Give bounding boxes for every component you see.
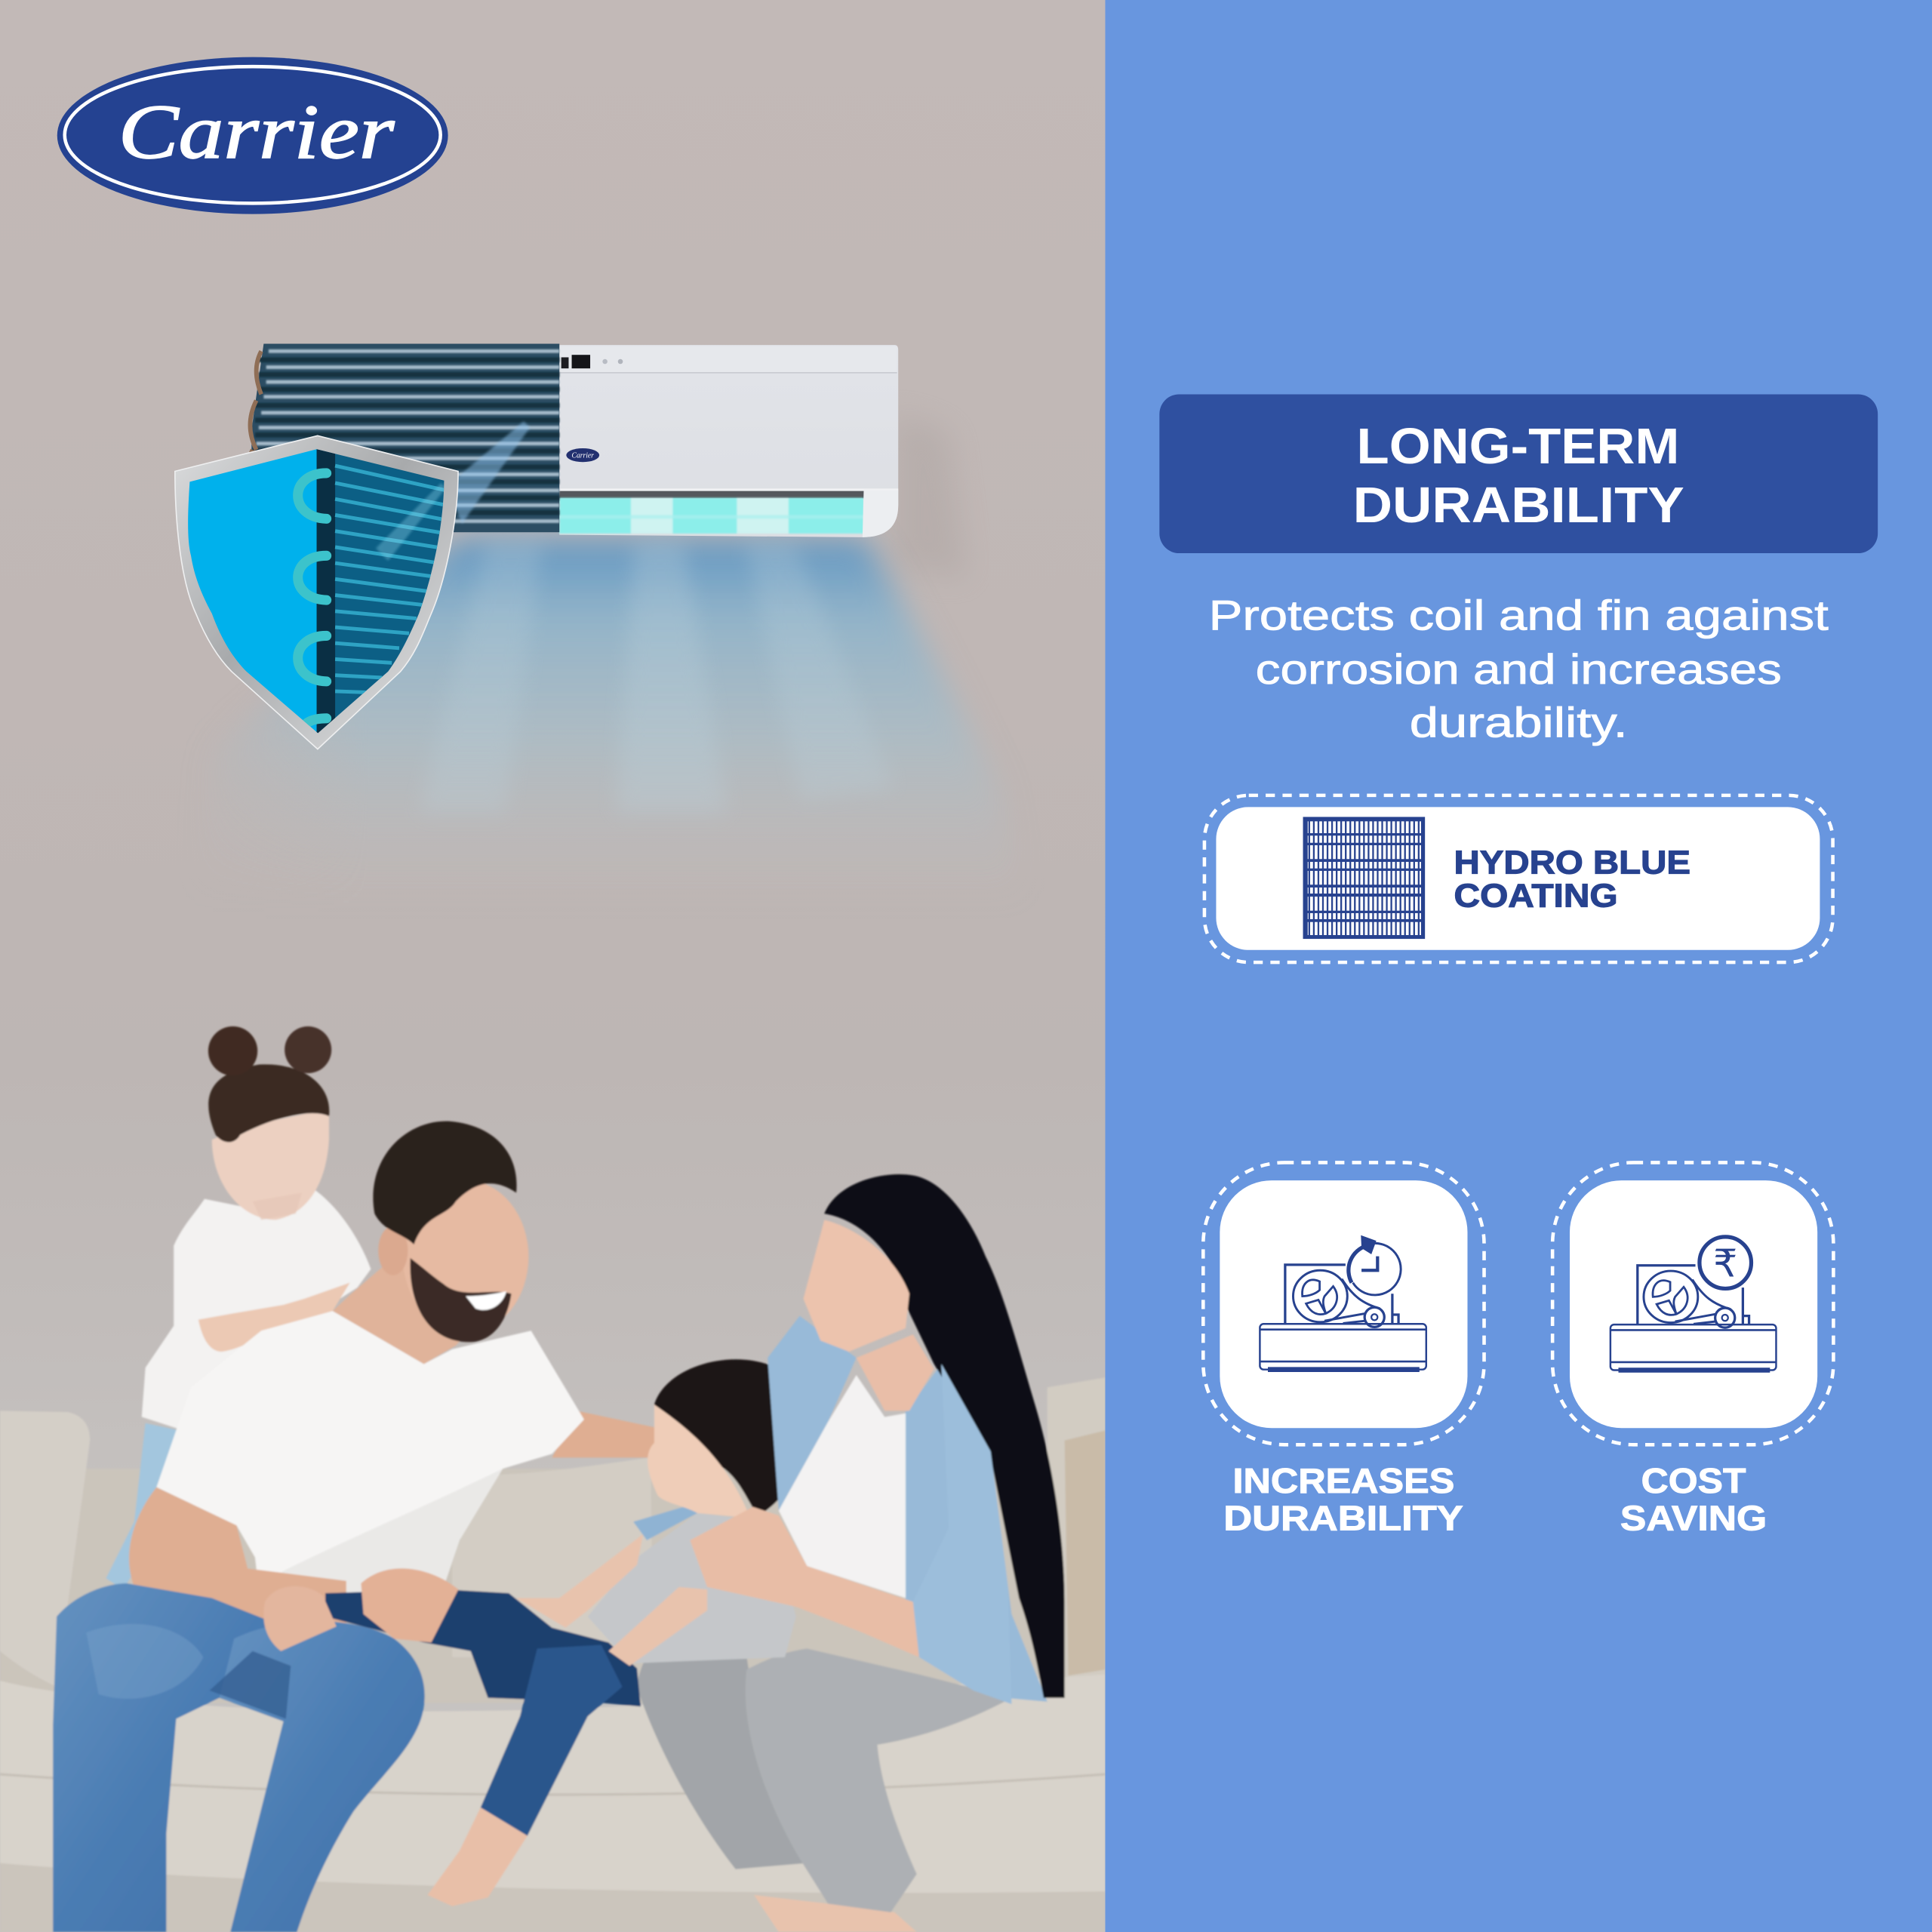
heading banner bbox=[1159, 394, 1878, 553]
boy torso bbox=[516, 1359, 800, 1663]
small logo bbox=[566, 448, 599, 462]
heading banner: DURABILITY bbox=[1353, 477, 1684, 534]
coating label bbox=[1454, 845, 1690, 915]
photo: family on sofa bbox=[0, 1026, 1105, 1932]
woman jeans bbox=[637, 1628, 1011, 1932]
logo: Carrier: Carrier bbox=[118, 89, 395, 175]
panel: photo background bbox=[0, 0, 1105, 1932]
woman bbox=[609, 1174, 1065, 1704]
boy legs bbox=[263, 1568, 641, 1906]
feature: cost saving bbox=[1552, 1162, 1833, 1538]
cost label: COST bbox=[1641, 1461, 1746, 1500]
description text bbox=[1209, 592, 1829, 746]
panel: blue right column bbox=[1105, 0, 1932, 1932]
feature: hydro blue coating bbox=[1204, 795, 1833, 962]
small logo: Carrier bbox=[572, 452, 595, 460]
unit wall shadow bbox=[894, 413, 968, 579]
cost label bbox=[1620, 1461, 1767, 1538]
shield icon bbox=[175, 435, 458, 749]
durability label bbox=[1223, 1461, 1463, 1538]
cold air stream bbox=[257, 532, 981, 823]
description text: Protects coil and fin against bbox=[1209, 592, 1829, 638]
man arm right bbox=[552, 1411, 658, 1457]
icon: AC with rupee bbox=[1611, 1237, 1776, 1373]
durability label: DURABILITY bbox=[1223, 1499, 1463, 1538]
girl bbox=[106, 1026, 371, 1589]
heading banner: LONG-TERM bbox=[1357, 418, 1679, 475]
coating label: HYDRO BLUE bbox=[1454, 845, 1690, 881]
icon: coil bbox=[1303, 817, 1425, 939]
durability label: INCREASES bbox=[1232, 1461, 1454, 1500]
cost label: SAVING bbox=[1620, 1499, 1767, 1538]
man shirt bbox=[156, 1311, 584, 1601]
icon: AC with rupee: ₹ bbox=[1713, 1241, 1737, 1285]
exposed coil bbox=[247, 344, 559, 532]
description text: corrosion and increases bbox=[1256, 646, 1782, 693]
icon: AC with clock bbox=[1260, 1235, 1426, 1372]
cyan outlet bbox=[559, 498, 863, 534]
coating label: COATING bbox=[1454, 878, 1618, 915]
man arm left bbox=[129, 1487, 346, 1626]
coil tubes bbox=[298, 473, 327, 740]
logo: Carrier bbox=[57, 57, 448, 214]
man jeans bbox=[53, 1583, 425, 1932]
display panel bbox=[561, 355, 623, 368]
man head bbox=[333, 1121, 528, 1364]
description text: durability. bbox=[1410, 699, 1628, 746]
sofa bbox=[0, 1377, 1105, 1932]
feature: increases durability bbox=[1203, 1162, 1484, 1538]
air conditioner unit bbox=[559, 345, 898, 537]
